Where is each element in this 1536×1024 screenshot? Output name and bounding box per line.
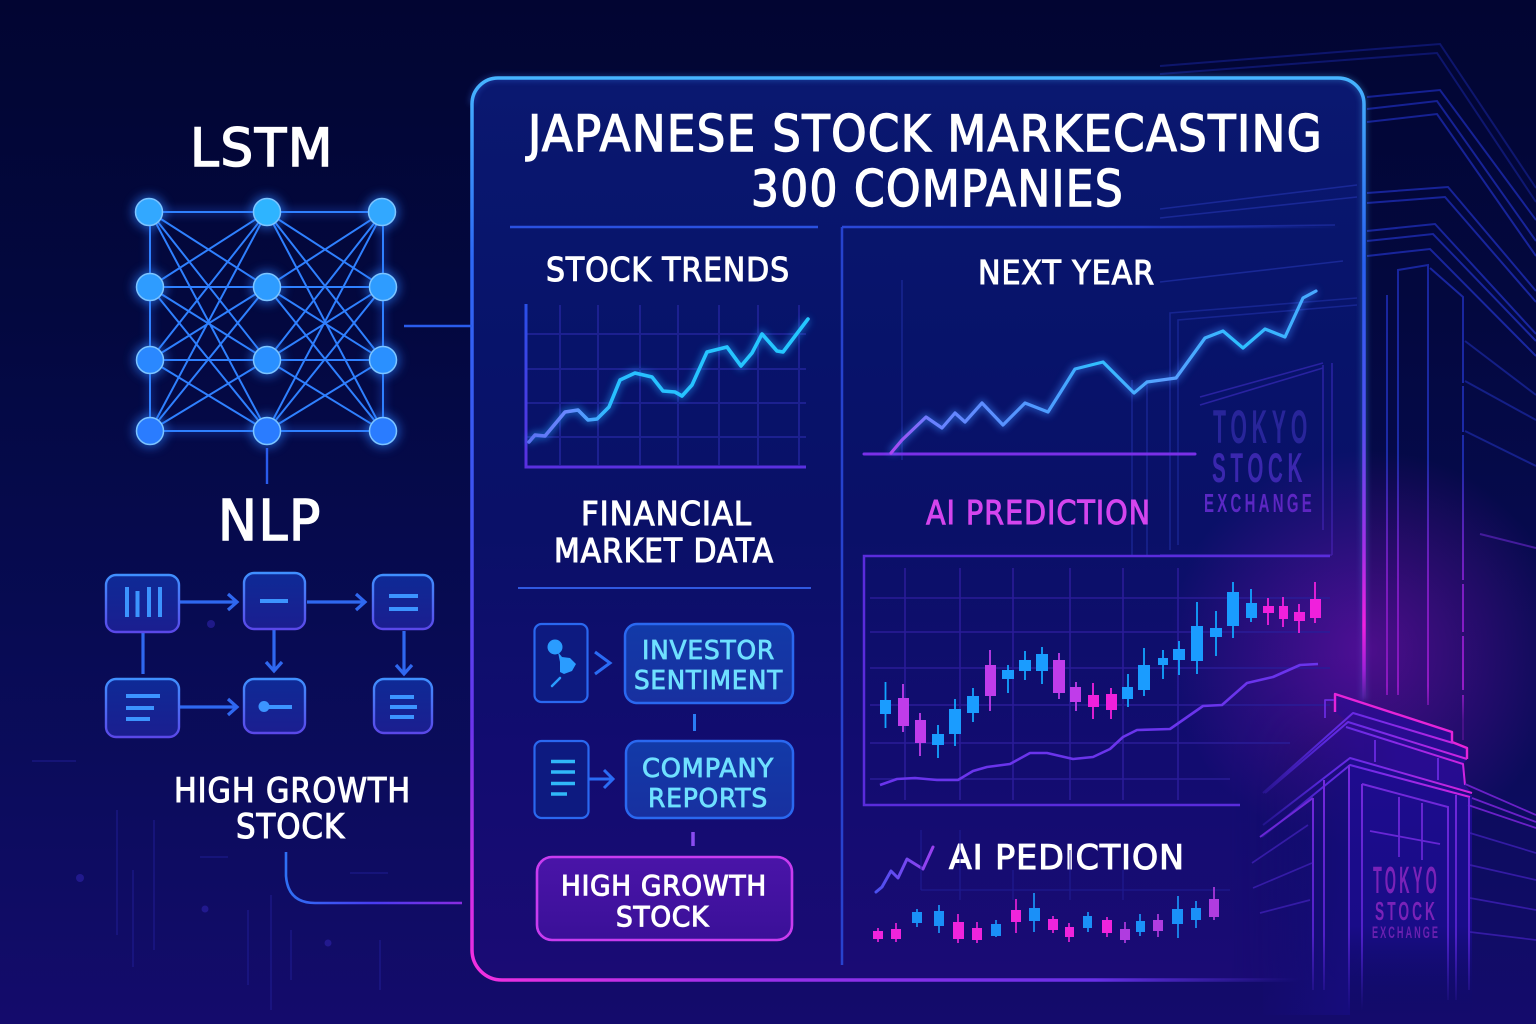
panel: main forecast card: TOKYO: [1213, 400, 1312, 453]
panel: main forecast card: [472, 78, 1536, 980]
heading: AI prediction: AI PREDICTION: [926, 493, 1151, 532]
moving average line: [880, 664, 1318, 785]
connector: reports to high growth: [691, 832, 695, 846]
flow arrows: [143, 594, 412, 715]
network nodes: [136, 198, 396, 444]
box: high growth stock: HIGH GROWTH: [561, 869, 767, 902]
box: company reports: COMPANY: [642, 754, 774, 784]
connector: high growth to panel: [286, 852, 462, 903]
heading: NLP: NLP: [218, 489, 322, 554]
icon: spark line: [876, 847, 933, 892]
panel left and right border: [472, 78, 1338, 950]
background building line art: upper right: [1160, 44, 1536, 740]
sign: Tokyo Stock Exchange (lower): [1372, 860, 1440, 942]
heading: financial market data: FINANCIAL: [581, 494, 752, 533]
building walls line art: [1260, 765, 1469, 1013]
network nodes glow: [132, 195, 400, 448]
box: company reports: REPORTS: [648, 784, 768, 814]
panel bottom border: [472, 950, 1300, 980]
title: 300 COMPANIES: [751, 160, 1124, 218]
small purple and pink candles: [873, 887, 1219, 943]
connector: sentiment to reports: [693, 714, 696, 731]
small blue candles: [912, 893, 1201, 938]
panel glow: [472, 78, 1364, 700]
sign: Tokyo Stock Exchange (lower): STOCK: [1375, 896, 1438, 926]
panel background: building sign line art: [902, 185, 1357, 555]
flow box: text lines: [106, 679, 179, 737]
heading: next year: NEXT YEAR: [978, 253, 1155, 292]
heading: financial market data: MARKET DATA: [554, 531, 774, 570]
box: investor sentiment: [625, 624, 793, 703]
purple and pink candles: [898, 582, 1321, 756]
line chart: stock trends: [526, 304, 808, 467]
neural network diagram: [132, 195, 400, 448]
box: investor sentiment: SENTIMENT: [634, 666, 783, 696]
flow box: bars: [106, 575, 179, 632]
sign: Tokyo Stock Exchange (upper): STOCK: [1212, 444, 1307, 491]
Tokyo Stock Exchange building, lower right: [1252, 694, 1536, 1015]
NLP flow diagram: [106, 573, 433, 737]
heading: high growth stock: STOCK: [236, 807, 346, 847]
panel dividers: [510, 227, 1340, 965]
box: high growth stock: STOCK: [616, 900, 709, 933]
sign: Tokyo Stock Exchange (upper): EXCHANGE: [1204, 488, 1315, 518]
box: company reports: [626, 741, 793, 818]
flow box: three lines: [374, 679, 432, 733]
blue candles: [880, 582, 1257, 758]
heading text: AI PEDICTION: [949, 838, 1185, 878]
arrow: sentiment chevron: [595, 652, 610, 674]
network glow: [150, 212, 383, 431]
line chart: next year: [864, 291, 1316, 454]
candlestick chart: small bottom: [873, 830, 1230, 943]
arrow: reports: [589, 770, 613, 788]
heading: AI pediction with spark icon: [876, 838, 1185, 892]
flow box: dash: [244, 573, 305, 629]
heading: LSTM: LSTM: [190, 118, 334, 179]
network edges: [150, 212, 383, 431]
icon: reports card: [534, 741, 588, 818]
icon: sentiment card: [534, 624, 588, 702]
connector: network to NLP: [266, 448, 268, 484]
candlestick chart: AI prediction: [864, 556, 1330, 805]
building roof line art: [1262, 694, 1536, 837]
sign: Tokyo Stock Exchange (lower): EXCHANGE: [1372, 923, 1440, 942]
connector: network to panel: [404, 325, 472, 327]
panel glow: magenta lower right: [1168, 450, 1536, 850]
flow box: two lines: [373, 575, 433, 629]
box: high growth stock: [537, 857, 792, 940]
title: [525, 105, 1323, 218]
heading: high growth stock: [174, 771, 411, 847]
flow box: slider: [244, 679, 305, 733]
box: investor sentiment: INVESTOR: [642, 636, 775, 666]
heading: stock trends: STOCK TRENDS: [546, 250, 790, 289]
building side windows: [1252, 825, 1536, 940]
sign: Tokyo Stock Exchange (upper): [1204, 400, 1315, 518]
heading: high growth stock: HIGH GROWTH: [174, 771, 411, 811]
title: JAPANESE STOCK MARKECASTING: [525, 105, 1323, 163]
heading: financial market data: [554, 494, 774, 570]
